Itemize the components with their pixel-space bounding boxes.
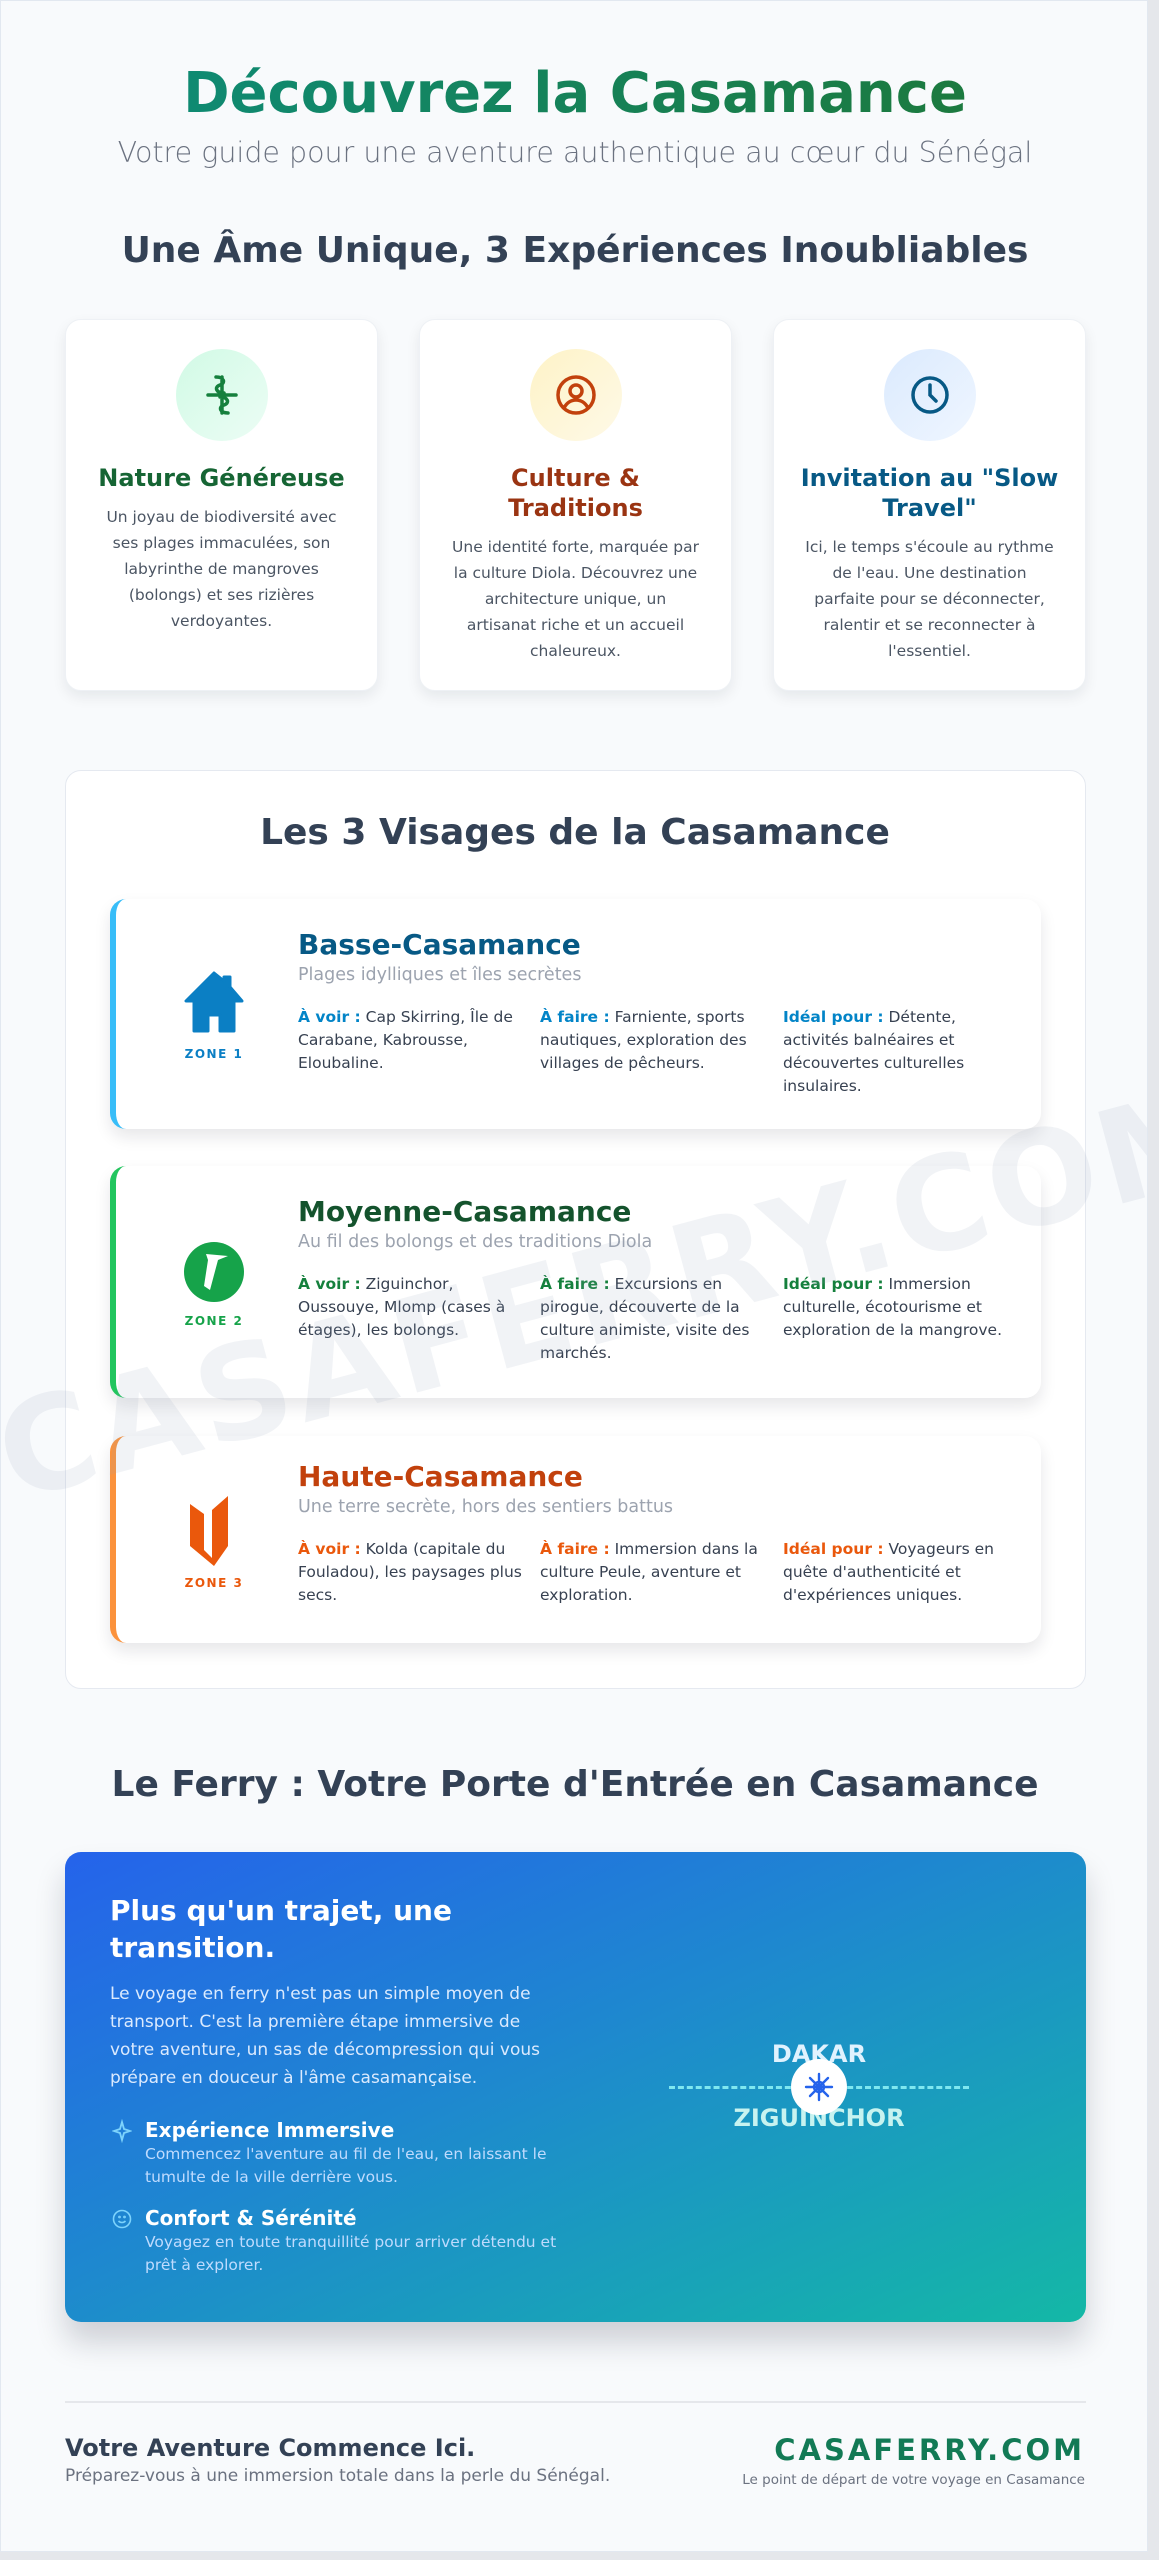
- zone card: haute: [110, 1436, 1041, 1643]
- subtitle: Votre guide pour une aventure authentique au cœur du Sénégal: [118, 136, 1032, 169]
- card text: Un joyau de biodiversité avec ses plages immaculées, son labyrinthe de mangroves (bolongs) et ses rizières verdoyantes.: [106, 508, 337, 630]
- icon: sparkle: [112, 2119, 132, 2143]
- zone subtitle: Une terre secrète, hors des sentiers battus: [298, 1497, 673, 1517]
- footer brand: Le point de départ de votre voyage en Casamance: [742, 2472, 1085, 2488]
- column: ideal: Idéal pour : Détente, activités balnéaires et découvertes culturelles insulaires.: [783, 1008, 964, 1095]
- column: ideal: Idéal pour : Immersion culturelle, écotourisme et exploration de la mangrove.: [783, 1275, 1002, 1339]
- column: faire: À faire : Immersion dans la culture Peule, aventure et exploration.: [540, 1540, 758, 1604]
- heading: experiences: Une Âme Unique, 3 Expériences Inoubliables: [122, 230, 1028, 271]
- icon: ship wheel: [791, 2059, 847, 2115]
- column: ideal: Idéal pour : Voyageurs en quête d'authenticité et d'expériences uniques.: [783, 1540, 994, 1604]
- icon: clock: [884, 349, 976, 441]
- card text: Une identité forte, marquée par la culture Diola. Découvrez une architecture unique, un artisanat riche et un accueil chaleureux.: [452, 538, 699, 660]
- icon: map shape: [190, 1496, 228, 1566]
- zone title: Haute-Casamance: [298, 1460, 583, 1493]
- footer brand: CASAFERRY.COM: [774, 2433, 1085, 2467]
- icon: green circle: [184, 1242, 244, 1302]
- feature: immersive: Expérience Immersive: [145, 2118, 394, 2142]
- feature: confort: Confort & Sérénité: [145, 2206, 357, 2230]
- panel: ferry: [65, 1852, 1086, 2322]
- zone card: moyenne: [110, 1166, 1041, 1398]
- card: culture: [419, 319, 732, 691]
- column: voir: À voir : Ziguinchor, Oussouye, Mlomp (cases à étages), les bolongs.: [298, 1275, 505, 1339]
- icon: house: [184, 971, 244, 1032]
- zone label: ZONE 1: [185, 1047, 243, 1061]
- ferry paragraph: Le voyage en ferry n'est pas un simple moyen de transport. C'est la première étape immersive de votre aventure, un sas de décompression qui vous prépare en douceur à l'âme casamançaise.: [110, 1984, 540, 2088]
- card: nature: [65, 319, 378, 691]
- column: faire: À faire : Excursions en pirogue, découverte de la culture animiste, visite des marchés.: [540, 1275, 749, 1362]
- card title: Traditions: [508, 494, 643, 522]
- zone title: Moyenne-Casamance: [298, 1195, 631, 1228]
- footer left: Votre Aventure Commence Ici.: [65, 2434, 475, 2462]
- icon: smile: [112, 2210, 132, 2228]
- card title: Invitation au "Slow Travel": [801, 464, 1058, 522]
- card text: Ici, le temps s'écoule au rythme de l'eau. Une destination parfaite pour se déconnecter, ralentir et se reconnecter à l'essentiel.: [805, 538, 1054, 660]
- footer brand: [742, 2433, 1085, 2488]
- heading: visages: Les 3 Visages de la Casamance: [260, 812, 890, 853]
- icon: person: [530, 349, 622, 441]
- panel: 3 visages: [65, 770, 1086, 1689]
- heading: ferry: Le Ferry : Votre Porte d'Entrée en Casamance: [112, 1764, 1038, 1805]
- zone card: basse: [110, 899, 1041, 1129]
- card: slow travel: [773, 319, 1086, 691]
- footer left: [65, 2434, 610, 2486]
- zone subtitle: Au fil des bolongs et des traditions Diola: [298, 1232, 652, 1252]
- footer left: Préparez-vous à une immersion totale dans la perle du Sénégal.: [65, 2466, 610, 2486]
- route graphic: [669, 2040, 969, 2132]
- zone title: Basse-Casamance: [298, 928, 581, 961]
- label: ziguinchor: ZIGUINCHOR: [733, 2104, 905, 2132]
- card title: Culture &: [511, 464, 640, 492]
- card title: Nature Généreuse: [98, 464, 345, 492]
- ferry title: transition.: [110, 1931, 275, 1964]
- zone subtitle: Plages idylliques et îles secrètes: [298, 965, 581, 985]
- column: voir: À voir : Kolda (capitale du Fouladou), les paysages plus secs.: [298, 1540, 522, 1604]
- column: voir: À voir : Cap Skirring, Île de Carabane, Kabrousse, Eloubaline.: [298, 1008, 513, 1072]
- column: faire: À faire : Farniente, sports nautiques, exploration des villages de pêcheurs.: [540, 1008, 747, 1072]
- feature: immersive: [112, 2118, 547, 2186]
- feature: immersive: Commencez l'aventure au fil de l'eau, en laissant le tumulte de la ville derrière vous.: [145, 2145, 547, 2186]
- ferry title: [110, 1894, 452, 1964]
- feature: confort: [112, 2206, 556, 2274]
- zone label: ZONE 2: [185, 1314, 243, 1328]
- ferry title: Plus qu'un trajet, une: [110, 1894, 452, 1927]
- feature: confort: Voyagez en toute tranquillité pour arriver détendu et prêt à explorer.: [145, 2233, 556, 2274]
- label: dakar: DAKAR: [772, 2040, 866, 2068]
- title: Découvrez la Casamance: [183, 61, 967, 126]
- icon: nature: [176, 349, 268, 441]
- card title: [508, 464, 643, 522]
- zone label: ZONE 3: [185, 1576, 243, 1590]
